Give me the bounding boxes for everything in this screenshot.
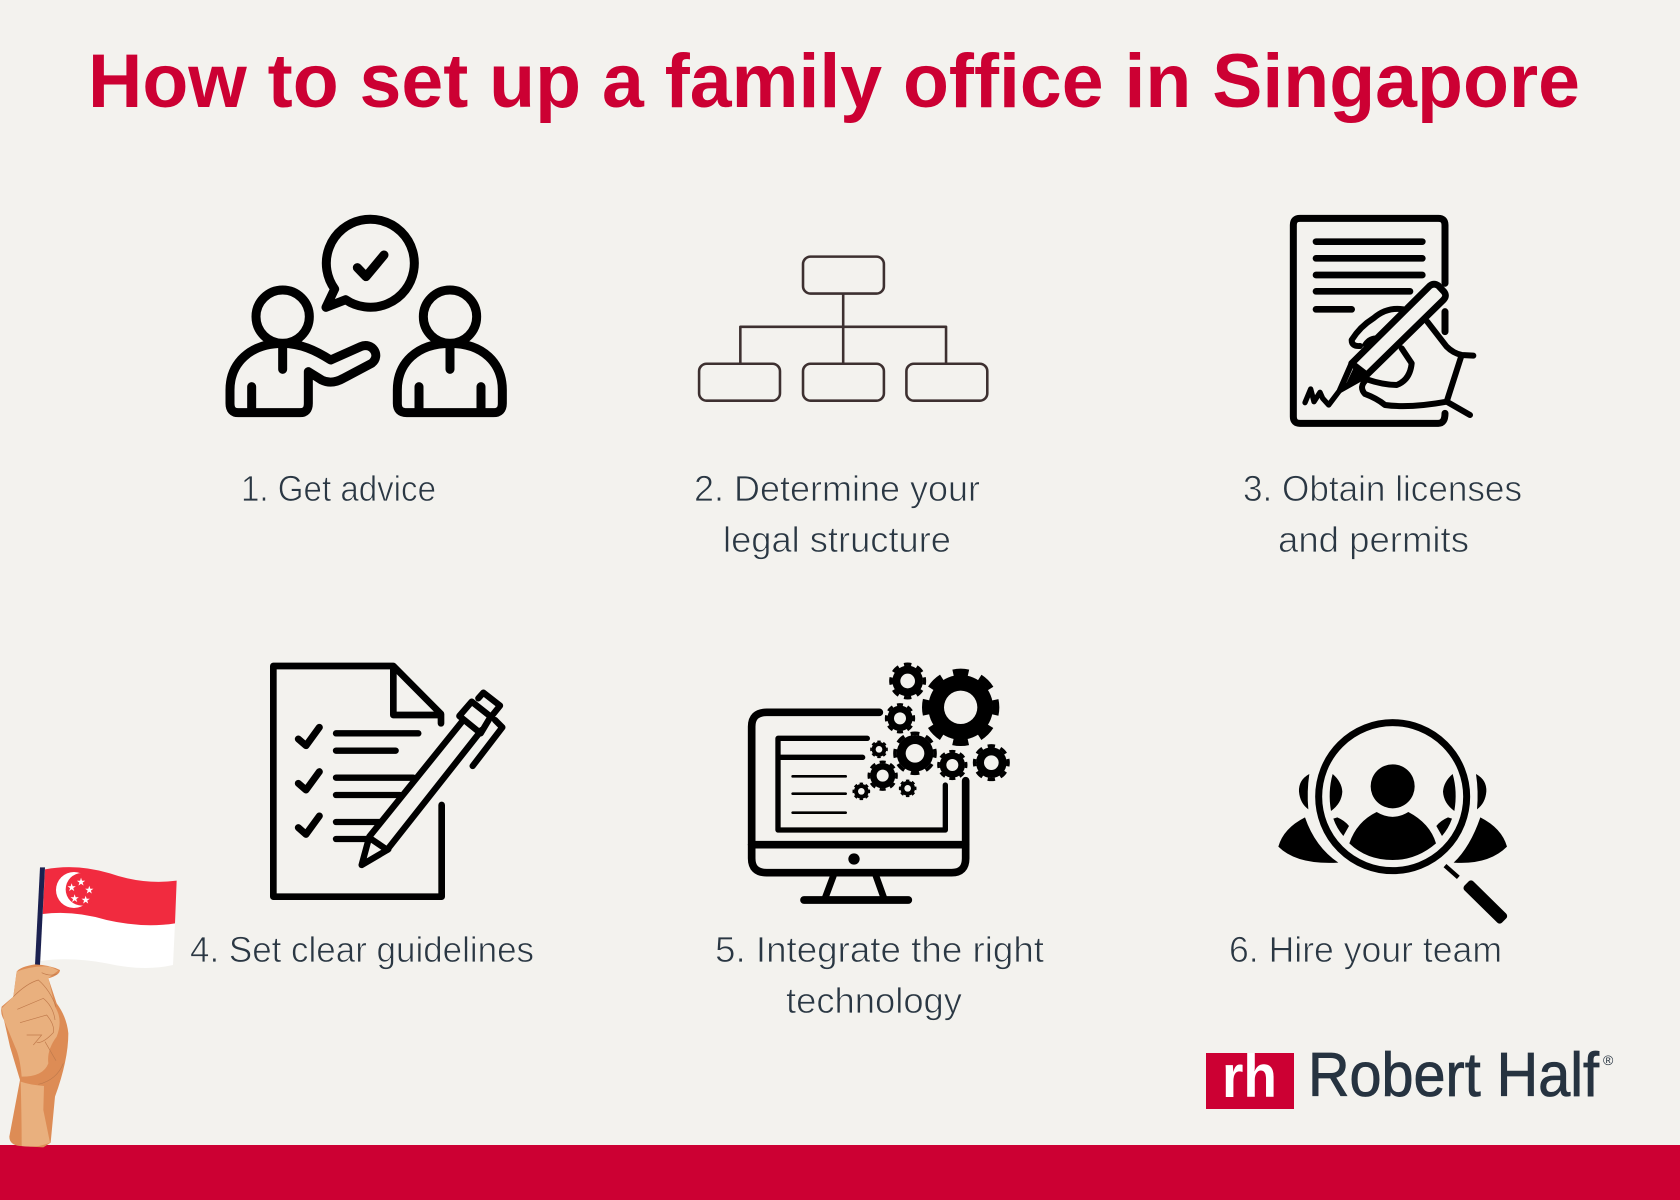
label: step 4: 4. Set clear guidelines: [190, 929, 534, 970]
flag: ★: [81, 894, 90, 907]
step 5: integrate technology: [715, 664, 1044, 1021]
label: step 5: [715, 929, 1044, 1021]
logo mark: rh: [1222, 1043, 1277, 1110]
label: step 6: 6. Hire your team: [1229, 929, 1502, 970]
icon: organisation chart: [699, 257, 987, 401]
flag: ★: [76, 875, 86, 888]
label: step 3: 3. Obtain licenses: [1243, 468, 1522, 509]
step 6: hire your team: [1229, 723, 1509, 970]
icon: two people with check speech bubble: [230, 219, 502, 413]
step 1: get advice: [230, 219, 502, 509]
logo mark: [1206, 1043, 1294, 1110]
flag: ★: [70, 892, 79, 905]
icon: computer with gears: [752, 664, 1008, 900]
label: step 3: and permits: [1278, 519, 1469, 560]
step 2: legal structure: [694, 257, 987, 560]
label: step 1: 1. Get advice: [241, 468, 436, 509]
label: step 5: technology: [786, 980, 962, 1021]
flag: ★: [67, 881, 76, 894]
bottom red band: [0, 1145, 1680, 1200]
title: How to set up a family office in Singapore: [88, 39, 1580, 124]
flag pole: [35, 867, 45, 965]
label: step 3: [1243, 468, 1522, 560]
logo wordmark: Robert Half: [1308, 1041, 1600, 1110]
flag: [41, 867, 177, 968]
icon: magnifier over people: [1278, 723, 1509, 925]
icon: checklist with pencil: [273, 666, 502, 897]
step 4: clear guidelines: [190, 666, 534, 970]
logo: Robert Half: [1206, 1041, 1614, 1110]
flag: ★: [85, 884, 94, 897]
illustration: hand holding Singapore flag: [1, 867, 177, 1147]
icon: signing a document: [1293, 218, 1473, 423]
label: step 2: [694, 468, 980, 560]
hand: [1, 964, 68, 1147]
icon: gears: [853, 664, 1008, 799]
step 3: licenses and permits: [1243, 218, 1522, 560]
label: step 2: legal structure: [723, 519, 951, 560]
label: step 5: 5. Integrate the right: [715, 929, 1044, 970]
label: step 2: 2. Determine your: [694, 468, 980, 509]
registered mark: ®: [1603, 1052, 1614, 1068]
